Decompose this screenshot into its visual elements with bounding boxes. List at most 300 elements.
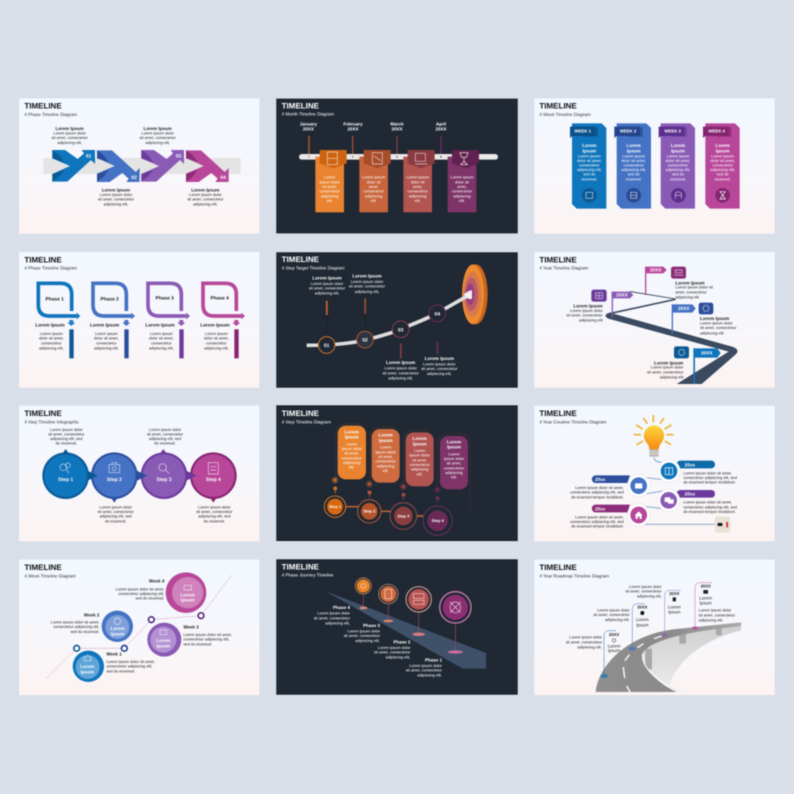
card: week 4: sed do [717, 172, 729, 177]
phase 1 loop [38, 283, 80, 358]
card 2: consectetur [376, 459, 396, 464]
text: phase 4: Lorem Ipsum [200, 322, 230, 328]
month: February: February [343, 121, 363, 126]
text: step 4: do eiusmod. [204, 519, 225, 523]
text: phase 3: Lorem ipsum dolor [141, 131, 174, 135]
week 2 circle: Lorem [111, 626, 125, 631]
phase 4 marker [355, 578, 371, 594]
week 4 circle: Ipsum [181, 597, 195, 603]
card: week 1: dolor sit amet, [577, 158, 602, 163]
subtitle: 4 Week Timeline Diagram [24, 573, 76, 578]
phase 3 loop [148, 283, 190, 358]
title: TIMELINE [539, 255, 577, 264]
text: phase 1: adipiscing elit, [417, 673, 442, 678]
text: step 3: sit amet, consectetur [383, 371, 419, 375]
text: step 2: adipiscing elit, [355, 289, 379, 294]
subtitle: 4 Phase Timeline Diagram [24, 266, 77, 271]
card 1: elit. [349, 465, 355, 470]
panel: 4 month timeline [277, 99, 517, 233]
text: step 2: Lorem ipsum dolor [351, 279, 383, 284]
week 1 circle: Ipsum [80, 669, 94, 674]
marker 4: 20XX [701, 584, 711, 588]
wall socket [715, 517, 730, 533]
text: year 3: consectetur adipiscing elit, sed [683, 505, 737, 509]
title: TIMELINE [282, 409, 319, 418]
text: year 4: Lorem ipsum dolor sit [675, 285, 713, 290]
phase 2 loop [93, 283, 135, 358]
card 2 [370, 427, 400, 483]
text: year 1: consectetur adipiscing elit, sed [683, 475, 737, 480]
text: step 4: adipiscing elit, [427, 371, 452, 376]
card: week 2: Ipsum [627, 148, 641, 154]
node 03 [392, 321, 409, 338]
target [462, 264, 488, 324]
subtitle: 4 Step Timeline Infographic [24, 419, 79, 424]
card 3 [403, 150, 435, 212]
card 3: dolor sit [411, 180, 425, 184]
card: week 1: Lorem [582, 143, 596, 148]
pill 1: 20xx [685, 462, 695, 467]
road markings [623, 636, 678, 692]
panel: 4 step cards timeline [277, 406, 517, 541]
marker 2: Lorem [636, 617, 649, 622]
text: year 2: consectetur adipiscing elit, sed [570, 490, 624, 495]
month: February: 20XX [347, 126, 359, 131]
card: week 1: Lorem ipsum [578, 154, 601, 159]
card 2: Ipsum [379, 438, 393, 443]
card: week 2: dolor sit amet, [621, 158, 646, 163]
text: week 2: Lorem ipsum dolor sit amet, [51, 620, 99, 624]
text: year 4: amet, consectetur [675, 290, 707, 294]
step 2 circle: Step 2 [107, 477, 122, 482]
text: year 3: Lorem ipsum dolor [629, 584, 662, 589]
underpass [643, 625, 741, 692]
text: phase 2: adipiscing elit, [94, 346, 119, 350]
card 1: sit amet, [344, 451, 359, 456]
card 4: amet, [457, 184, 467, 189]
text: year 1: Lorem ipsum dolor [569, 635, 602, 640]
pill 2 [592, 475, 630, 483]
text: phase 2: Lorem ipsum [95, 331, 118, 336]
wire [639, 457, 717, 524]
card 1: sit amet, [322, 184, 337, 189]
text: phase 2: Lorem ipsum dolor [378, 645, 410, 650]
marker 3: Ipsum [668, 610, 680, 615]
panel: creative timeline [534, 406, 775, 541]
week 3 circle: Ipsum [156, 643, 170, 648]
week 2 circle [102, 611, 133, 642]
title: TIMELINE [539, 563, 577, 572]
node 02: 02 [362, 337, 368, 343]
card: week 2: adipiscing elit, [621, 167, 646, 172]
title: TIMELINE [282, 101, 319, 110]
node 04: 04 [435, 311, 440, 317]
marker 1: 20XX [609, 632, 619, 637]
week 2 circle: Ipsum [111, 631, 125, 636]
month: April: April [436, 121, 446, 126]
text: phase 2: Lorem ipsum dolor [100, 192, 132, 197]
card 4: adipiscing [453, 194, 471, 198]
marker 4 [692, 583, 712, 630]
title: TIMELINE [24, 409, 62, 418]
dashed trend line [47, 575, 232, 678]
connector segments [343, 507, 427, 516]
title: TIMELINE [24, 255, 62, 264]
card: week 1: adipiscing elit, [577, 167, 602, 172]
card 3: adipiscing [411, 467, 428, 472]
text: phase 1: sit amet, consectetur [406, 668, 442, 673]
text: phase 2: Lorem Ipsum [90, 322, 119, 328]
step 4 node: Step 4 [432, 518, 444, 523]
card: week 2 [614, 123, 651, 209]
phase labels: Phase 4 [211, 295, 229, 301]
card 4: elit. [451, 475, 457, 480]
subtitle: 4 Month Timeline Diagram [282, 112, 334, 117]
arrow 03 [141, 150, 184, 182]
phase labels: Phase 3 [156, 295, 174, 301]
pill 1 [677, 461, 715, 468]
arrow 02 [97, 150, 140, 182]
pill 2: 20xx [595, 477, 605, 482]
month: January: January [300, 121, 317, 126]
text: year 1: Lorem ipsum dolor sit amet, [683, 471, 732, 475]
text: week 2: Week 2 [84, 613, 99, 618]
text: week 4: consectetur adipiscing elit, [118, 591, 164, 596]
card 4 [448, 150, 479, 212]
card: week 3: sed do [672, 172, 684, 177]
title: TIMELINE [539, 409, 577, 418]
text: week 4: Week 4 [149, 579, 164, 584]
text: step 1: Lorem Ipsum [312, 275, 342, 281]
panel: 4 week timeline [534, 98, 775, 234]
step 3 node [390, 503, 417, 529]
marker 1 [601, 631, 620, 678]
card: week 2: eiusmod. [626, 177, 642, 181]
week 4 circle: Lorem [181, 592, 195, 597]
text: week 1: Week 1 [106, 651, 122, 656]
text: phase 3: Lorem Ipsum [144, 126, 172, 131]
text: phase 4: Lorem ipsum [205, 331, 228, 336]
marker 4: Ipsum [700, 601, 712, 606]
text: year 4: sit amet, consectetur [699, 613, 735, 617]
text: phase 3: adipiscing elit, [355, 638, 380, 643]
text: phase 4: Lorem Ipsum [191, 187, 219, 192]
text: week 3: Lorem ipsum dolor sit amet, [183, 632, 232, 637]
card: week 3: consectetur [668, 163, 688, 167]
card 4: Lorem ipsum [451, 175, 473, 180]
subtitle: 4 Year Creative Timeline Diagram [539, 419, 606, 424]
text: phase 3: Lorem ipsum [150, 331, 173, 336]
text: phase 2: Lorem Ipsum [102, 187, 130, 192]
card 1: Ipsum [345, 434, 359, 440]
subtitle: 4 Week Timeline Diagram [539, 112, 591, 117]
pill 3: 20xx [685, 491, 695, 497]
arrow 01 [52, 150, 95, 182]
card: week 4: consectetur [713, 163, 733, 167]
month: April: 20XX [435, 126, 447, 131]
text: year 3: Lorem ipsum dolor [570, 308, 603, 313]
phase 4 loop [203, 283, 245, 358]
text: year 2: Lorem ipsum dolor sit amet, [575, 485, 624, 490]
node 04 [429, 305, 446, 322]
marker 3: Lorem [668, 604, 681, 609]
text: week 1: Lorem ipsum dolor sit amet, [106, 659, 155, 664]
month: March: 20XX [391, 126, 403, 131]
text: phase 1: Phase 1 [425, 658, 442, 663]
card 2: Lorem [379, 432, 393, 438]
card: week 3: Ipsum [671, 148, 685, 154]
text: year 4: do eiusmod tempor incididunt. [571, 524, 624, 529]
text: year 1: sit amet, consectetur [647, 370, 683, 374]
flag 2: 20XX [678, 306, 690, 311]
step 4 node [423, 506, 452, 535]
card: week 4: Lorem ipsum [711, 154, 734, 159]
card: week 1: Ipsum [582, 148, 596, 154]
text: year 1: adipiscing elit. [577, 645, 602, 649]
text: step 3: adipiscing elit, sed [149, 436, 181, 441]
text: phase 2: sit amet, consectetur [98, 197, 134, 202]
card 1: adipiscing [343, 460, 360, 465]
text: step 1: do eiusmod. [56, 441, 77, 446]
card: week 4: Ipsum [716, 148, 730, 154]
card 1: Lorem [346, 442, 357, 446]
card 4: consectetur [444, 466, 464, 470]
text: year 4: Lorem Ipsum [675, 280, 705, 285]
card 4 [438, 433, 470, 511]
text: step 4: Lorem ipsum dolor [198, 505, 231, 509]
text: year 4: adipiscing elit. [699, 618, 723, 622]
icon box 2 [699, 303, 713, 314]
text: phase 2: adipiscing elit, [386, 655, 410, 659]
title: TIMELINE [282, 562, 319, 571]
card 2: adipiscing [365, 194, 382, 198]
text: year 3: do eiusmod tempor incididunt. [683, 509, 736, 514]
subtitle: 4 Year Timeline Diagram [539, 266, 588, 271]
text: year 4: consectetur adipiscing elit, sed [570, 519, 624, 524]
card: week 4: eiusmod. [715, 177, 731, 181]
text: step 2: Lorem ipsum dolor [99, 505, 132, 509]
text: year 2: sit amet, consectetur [593, 612, 630, 617]
card 1: Lorem [324, 175, 335, 180]
month: January: 20XX [303, 126, 314, 131]
node rings [74, 613, 204, 651]
text: year 3: adipiscing elit [579, 318, 603, 322]
text: phase 4: Phase 4 [333, 605, 350, 610]
winding road [605, 291, 737, 384]
marker 4: Lorem [699, 595, 712, 600]
month: March: March [390, 121, 404, 126]
icon box 1 [674, 346, 689, 358]
panel: 4 phase loop timeline [19, 252, 259, 388]
node 01: 01 [324, 343, 329, 348]
journey road [325, 591, 486, 669]
text: phase 4: Lorem ipsum dolor [189, 192, 222, 197]
panel: 4 phase timeline [19, 98, 259, 234]
title: TIMELINE [539, 102, 577, 111]
text: phase 3: Lorem Ipsum [145, 322, 175, 328]
text: step 2: sit amet, consectetur [98, 509, 134, 514]
text: year 3: Lorem ipsum dolor sit amet, [683, 500, 732, 505]
pill 4: 20xx [595, 506, 605, 511]
week 1 circle [73, 651, 104, 682]
text: step 3: Lorem ipsum dolor [384, 366, 417, 371]
text: phase 1: Lorem ipsum [40, 331, 63, 336]
text: phase 2: dolor sit amet, [94, 336, 119, 341]
text: step 2: do eiusmod. [105, 519, 126, 523]
step 2 node [358, 500, 381, 523]
card: week 2: Lorem ipsum [622, 154, 645, 159]
text: year 2: adipiscing elit [700, 331, 724, 335]
arrow 01: 01 [86, 153, 91, 159]
node 2 [627, 474, 650, 497]
card 2: consectetur [364, 189, 384, 194]
text: phase 1: sit amet, consectetur [52, 135, 88, 140]
card: week 4: adipiscing elit, [710, 167, 735, 172]
text: step 1: Lorem ipsum dolor [311, 281, 343, 286]
text: phase 1: Lorem ipsum dolor [409, 663, 442, 668]
card 3: Lorem [413, 436, 427, 441]
text: phase 4: Lorem ipsum dolor [317, 611, 350, 616]
card: week 3: eiusmod. [670, 177, 686, 181]
card 4: Lorem [447, 439, 461, 444]
card 2 [359, 150, 391, 212]
card 4: consectetur [452, 189, 472, 194]
panel: 4 step target timeline [277, 253, 517, 387]
subtitle: 4 Phase Timeline Diagram [24, 112, 77, 117]
card 2: dolor sit [367, 180, 381, 184]
card 1 [336, 424, 366, 479]
card 4: ipsum dolor [444, 456, 464, 461]
text: week 2: sed do eiusmod. [70, 629, 99, 634]
text: phase 3: sit amet, consectetur [344, 633, 380, 638]
title: TIMELINE [282, 255, 319, 264]
flag 1: 20XX [701, 350, 713, 356]
flag 4: 20XX [650, 267, 662, 273]
week 1 circle: Lorem [80, 664, 94, 669]
text: phase 4: sit amet, consectetur [314, 616, 350, 620]
card: week 1: sed do [583, 172, 595, 177]
text: step 1: sit amet, consectetur [48, 432, 84, 437]
text: week 3: consectetur adipiscing elit, [183, 637, 229, 642]
panel: 4 step infographic [19, 406, 259, 541]
card: week 3: dolor sit amet, [666, 158, 690, 163]
text: year 1: Lorem Ipsum [654, 360, 683, 365]
card 4: elit. [459, 198, 465, 203]
text: week 1: consectetur adipiscing elit, [106, 664, 152, 669]
icon box 4 [671, 267, 686, 279]
card 2: elit. [371, 198, 377, 203]
marker 1: Ipsum [608, 648, 620, 653]
text: step 3: do eiusmod. [154, 441, 176, 446]
card: week 1: consectetur [579, 163, 600, 167]
week 3 circle: Lorem [156, 638, 170, 643]
card 3: Lorem [414, 448, 425, 453]
text: step 4: sit amet, consectetur [421, 366, 457, 371]
card 3: consectetur [408, 189, 428, 194]
text: step 3: adipiscing elit, [388, 376, 413, 380]
card 1: adipiscing [321, 194, 338, 198]
panel: 4 week circles timeline [19, 560, 259, 695]
text: year 3: sit amet, consectetur [625, 589, 662, 594]
phase 1 marker [440, 592, 471, 623]
card: week 1 [570, 123, 606, 209]
text: phase 2: consectetur [96, 341, 117, 345]
text: step 1: sit amet, consectetur [309, 286, 345, 291]
text: phase 1: consectetur [41, 341, 62, 345]
text: phase 1: Lorem Ipsum [35, 322, 65, 328]
text: year 1: adipiscing elit [660, 375, 684, 379]
flag 1 [693, 348, 721, 384]
text: step 2: sit amet, consectetur [349, 284, 385, 289]
subtitle: 4 Year Roadmap Timeline Diagram [539, 573, 609, 578]
subtitle: 4 Phase Journey Timeline [282, 573, 333, 578]
card: week 1: eiusmod. [581, 177, 597, 181]
flag 3: 20XX [616, 292, 628, 298]
marker 3 [662, 590, 681, 637]
card 3: consectetur [410, 462, 430, 467]
node 3 [657, 489, 680, 512]
card 2: Lorem ipsum [362, 175, 385, 180]
node 1 [658, 460, 680, 482]
text: phase 4: sit amet, consectetur [187, 197, 223, 202]
card 1: ipsum dolor [342, 446, 362, 451]
text: phase 3: Phase 3 [363, 623, 380, 628]
card 3: elit. [415, 198, 421, 203]
text: phase 3: Lorem ipsum dolor [347, 629, 380, 634]
card: week 1: WEEK 1 [574, 128, 591, 133]
card: week 2: WEEK 2 [620, 128, 636, 133]
text: year 2: Lorem ipsum dolor [700, 321, 733, 325]
card 2: amet, [369, 184, 379, 189]
arrow 04 [186, 150, 229, 182]
text: year 2: adipiscing elit. [605, 617, 630, 622]
pill 4 [592, 505, 630, 512]
week 3 circle [147, 623, 181, 657]
card 3: Ipsum [413, 441, 427, 446]
flag 4 [645, 267, 667, 295]
title: TIMELINE [24, 102, 62, 111]
card 3: elit. [417, 472, 423, 476]
flag 3 [612, 292, 633, 317]
text: phase 1: dolor sit amet, [39, 336, 64, 341]
text: phase 2: adipiscing elit, [104, 202, 128, 207]
text: year 4: Lorem ipsum dolor sit amet, [575, 515, 624, 519]
text: phase 3: dolor sit amet, [149, 336, 174, 341]
step 3 circle [141, 449, 197, 499]
arrow 03: 03 [176, 153, 181, 159]
icon box 3 [591, 290, 607, 302]
card: week 4: WEEK 4 [708, 128, 725, 133]
text: week 4: sed do eiusmod. [135, 596, 164, 601]
text: step 1: Lorem ipsum dolor [50, 427, 83, 432]
card 1: elit. [327, 198, 333, 203]
phase 2 marker [406, 587, 431, 612]
arrow tip [463, 290, 472, 299]
text: year 1: Lorem ipsum dolor [651, 365, 683, 370]
step 4 circle [190, 452, 237, 503]
text: phase 2: sit amet, consectetur [374, 650, 410, 654]
text: step 1: adipiscing elit, [315, 291, 339, 296]
card 1: consectetur [342, 456, 362, 460]
card 2: Lorem [380, 445, 391, 450]
marker 1: Lorem [608, 643, 620, 648]
text: phase 1: Lorem Ipsum [56, 126, 84, 131]
node 03: 03 [398, 327, 403, 333]
text: phase 1: adipiscing elit, [39, 346, 64, 350]
step 1 node: Step 1 [329, 504, 341, 509]
text: week 4: Lorem ipsum dolor sit amet, [116, 587, 164, 591]
step 2 circle [91, 452, 147, 503]
